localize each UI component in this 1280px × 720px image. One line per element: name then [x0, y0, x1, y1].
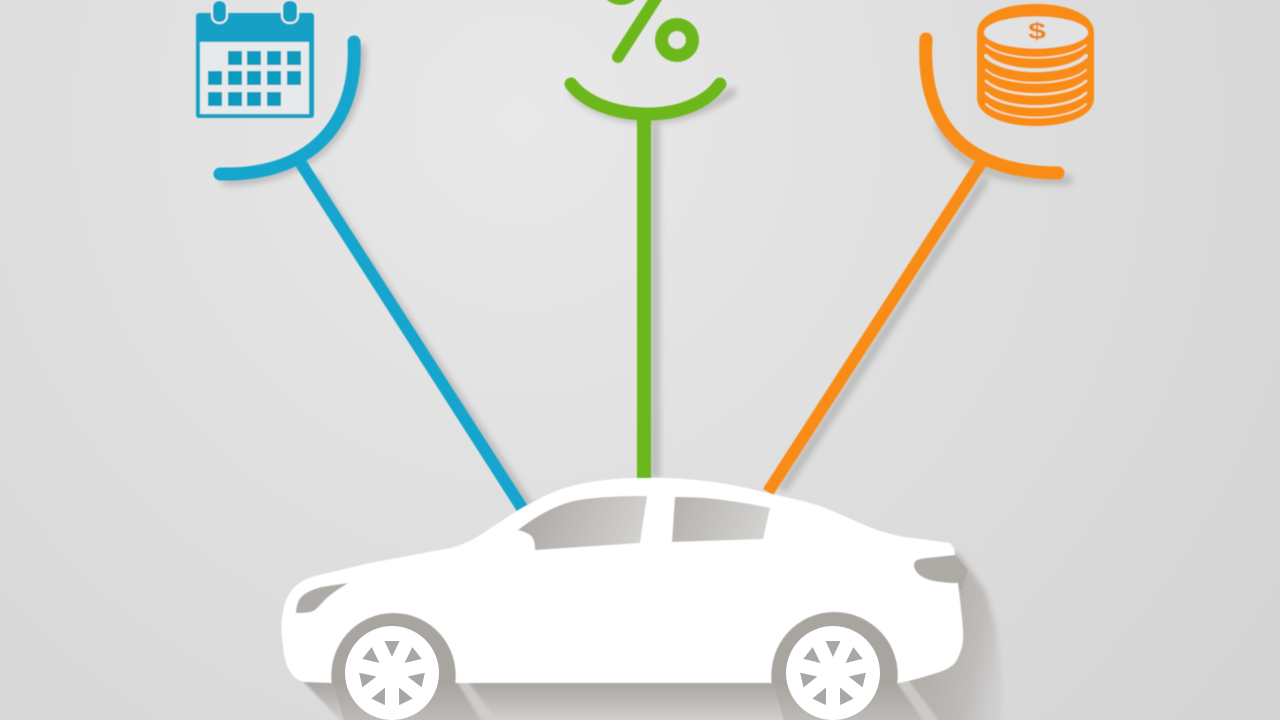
- connector: orange coins branch: [768, 39, 1058, 492]
- car long shadow: [300, 553, 1002, 720]
- icon: calendar: [196, 0, 314, 118]
- car headlight: [296, 583, 348, 613]
- shadow streaks behind wheels: [448, 665, 940, 720]
- wheel: rear: [786, 626, 880, 720]
- connector: green percent branch: [571, 84, 720, 480]
- wheel arches: [332, 612, 898, 683]
- icon: percent sign: [605, 0, 692, 57]
- car body: [282, 478, 963, 683]
- icon: stack of coins: $: [1028, 19, 1046, 44]
- wheel: front: [345, 626, 439, 720]
- car windshield window: [518, 496, 647, 550]
- icon: stack of coins: [977, 4, 1094, 126]
- connector: blue calendar branch: [220, 42, 522, 508]
- connector shadows: [226, 48, 1068, 508]
- car rear window: [672, 497, 770, 542]
